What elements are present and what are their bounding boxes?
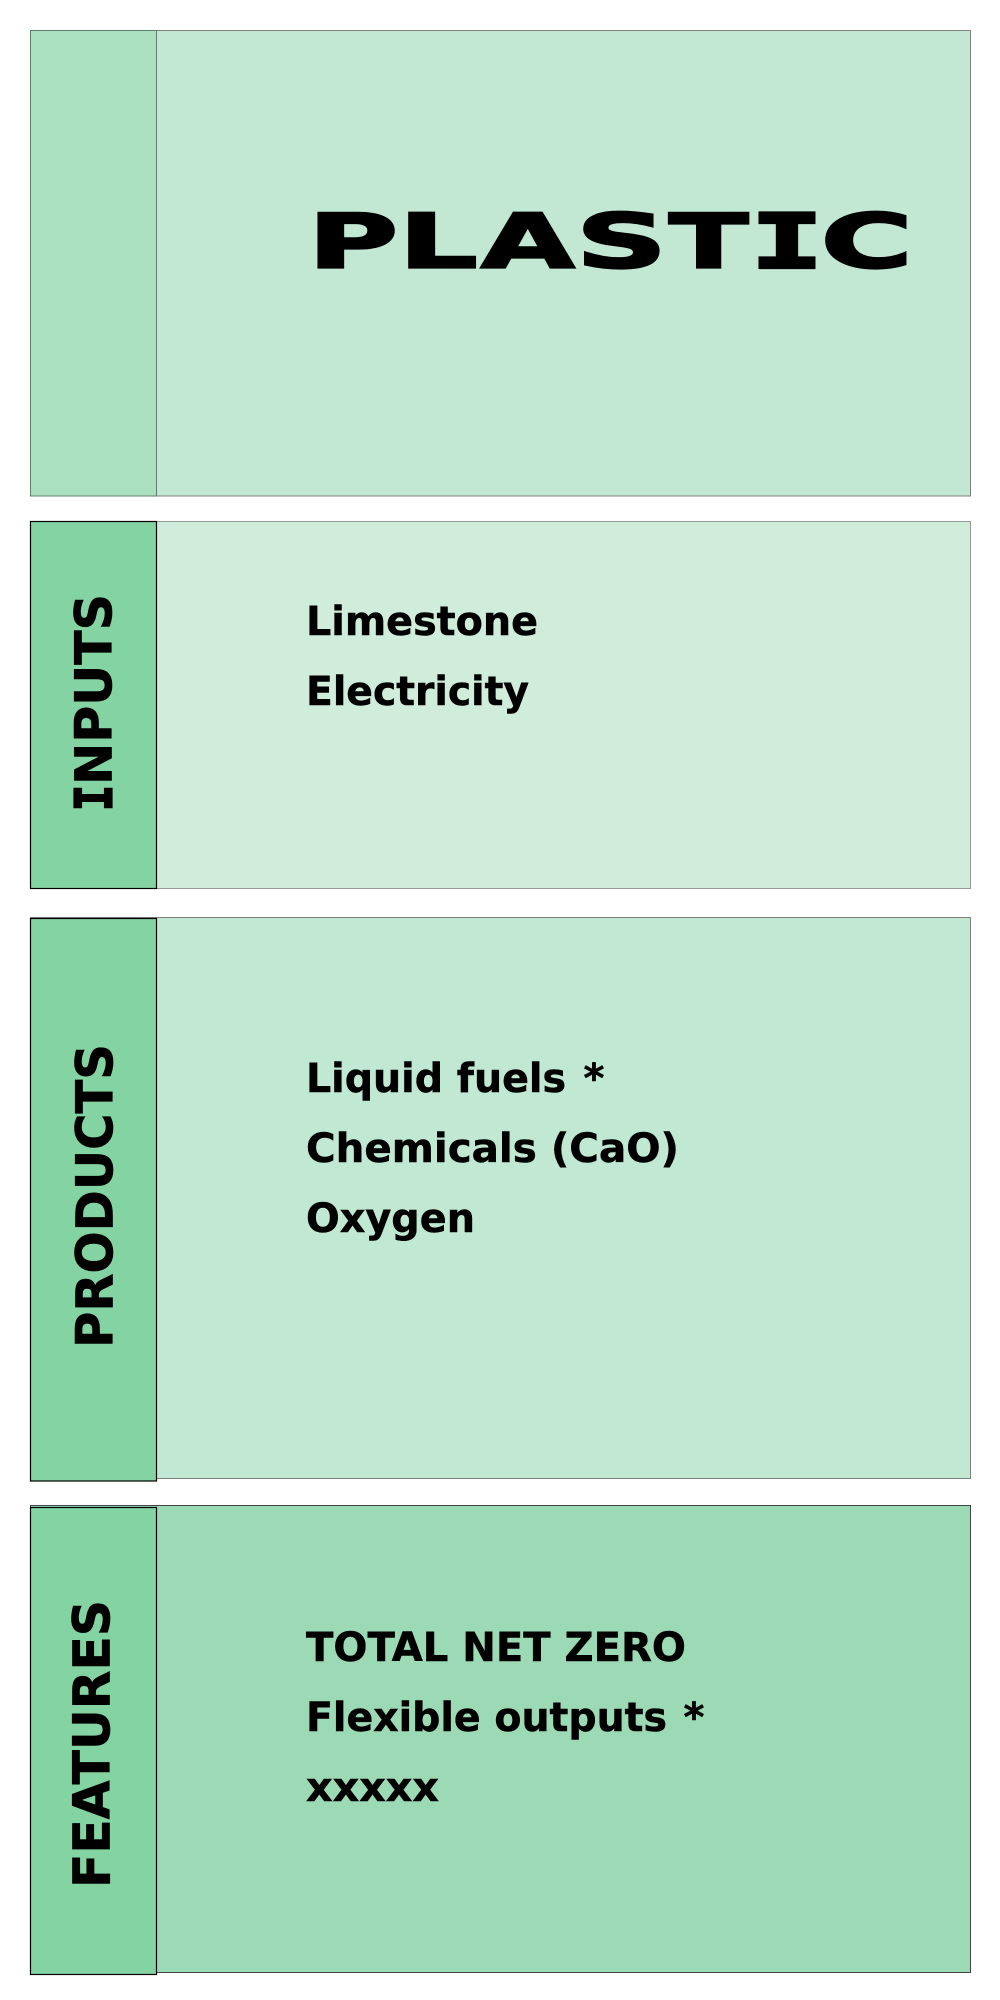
panel: products: [30, 918, 970, 1481]
title panel background: [30, 30, 970, 496]
heading: INPUTS: NPUTS: [66, 594, 124, 785]
title: PLASTIC: I: [751, 198, 823, 286]
title: PLASTIC: L: [399, 198, 478, 286]
features list: *: [684, 1695, 704, 1741]
panel: title: [30, 30, 970, 496]
products list: *: [584, 1056, 604, 1102]
features list: TOTAL NET ZERO: [306, 1625, 686, 1671]
title sidebar: [30, 30, 156, 496]
panel: inputs: [30, 522, 970, 888]
title: PLASTIC: P: [308, 198, 398, 286]
products sidebar: [30, 918, 156, 1481]
inputs sidebar: [30, 522, 156, 888]
title: PLASTIC: S: [576, 198, 667, 286]
features list: Flexible outputs: [306, 1695, 667, 1741]
products list: Liquid fuels: [306, 1056, 566, 1102]
inputs list: [306, 599, 538, 715]
inputs list: Electricity: [306, 669, 529, 715]
features list: [306, 1625, 704, 1811]
products panel background: [30, 918, 970, 1478]
products list: Oxygen: [306, 1196, 475, 1242]
panel: features: [30, 1506, 970, 1974]
heading: FEATURES: FEATURES: [64, 1600, 122, 1888]
features sidebar: [30, 1508, 156, 1974]
features list: xxxxx: [306, 1765, 439, 1811]
products list: Chemicals (CaO): [306, 1126, 679, 1172]
heading: PRODUCTS: PRODUCTS: [66, 1044, 126, 1348]
title: PLASTIC: C: [821, 198, 913, 286]
title: PLASTIC: A: [481, 198, 574, 286]
title: PLASTIC: [308, 198, 913, 286]
inputs list: Limestone: [306, 599, 538, 645]
title: PLASTIC: T: [669, 198, 748, 286]
heading: INPUTS: I: [66, 785, 124, 811]
inputs panel background: [30, 522, 970, 888]
features panel background: [30, 1506, 970, 1972]
products list: [306, 1056, 679, 1242]
